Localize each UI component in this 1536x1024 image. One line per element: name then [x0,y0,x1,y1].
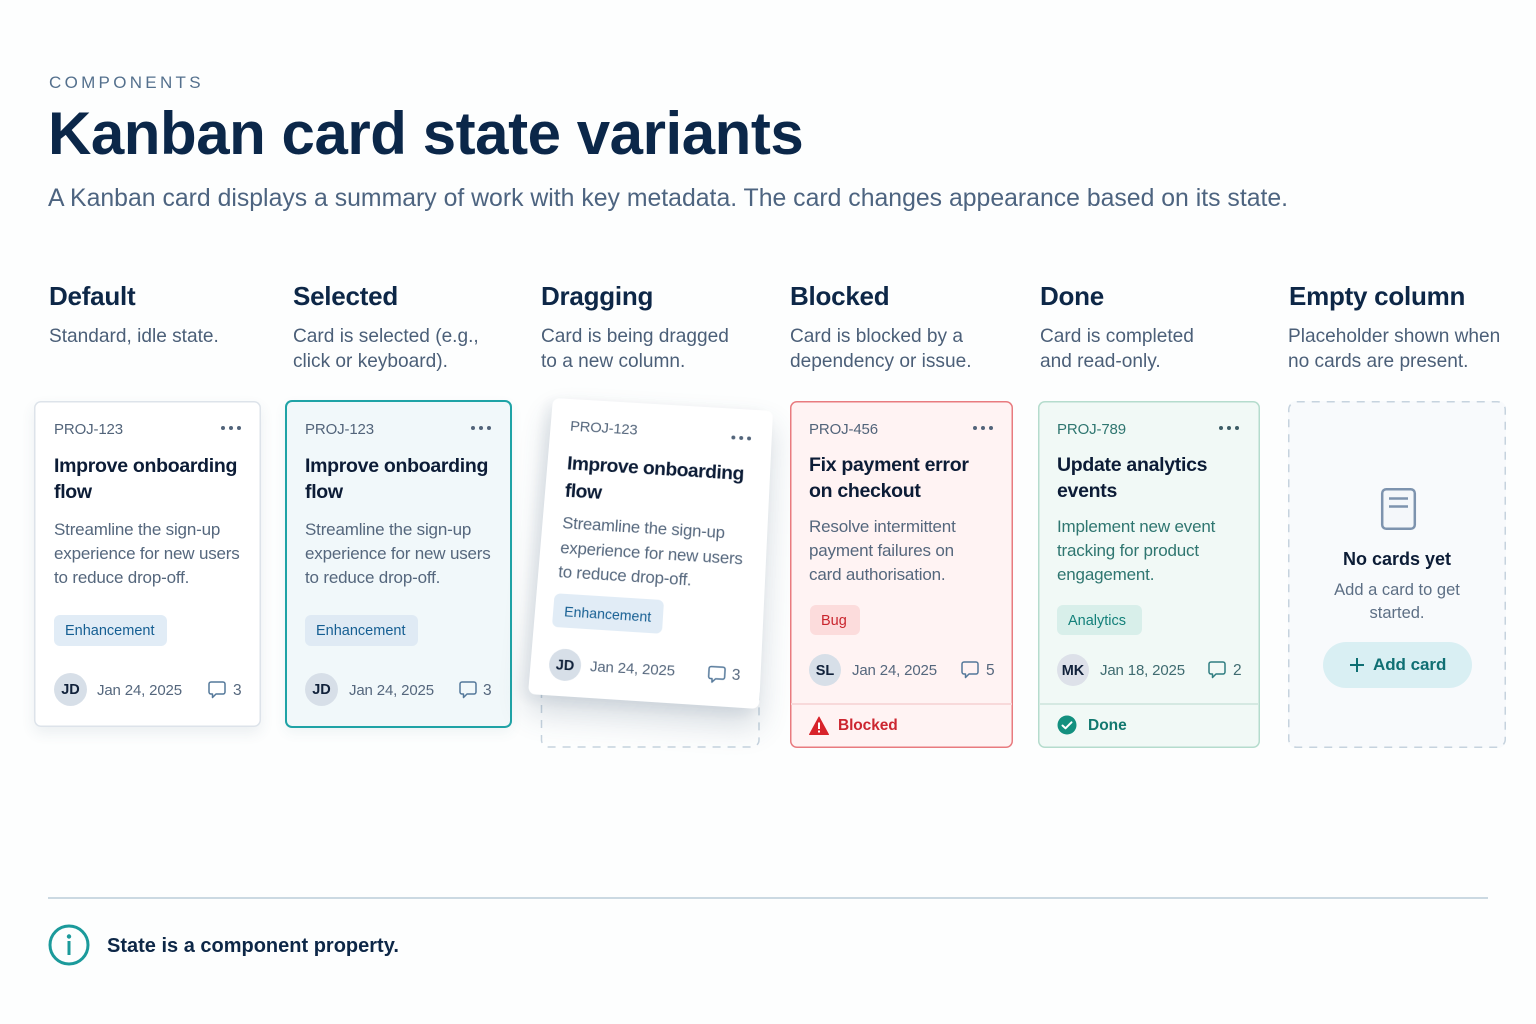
heading: Default: Default [49,281,135,311]
card description [54,520,240,587]
card description [558,513,743,590]
description: Done: and read-only. [1040,351,1161,372]
avatar [1057,654,1089,686]
avatar: JD [61,682,80,698]
card description: experience for new users [305,544,491,563]
tag: enhancement [54,615,167,646]
panel: blocked card [790,401,1013,748]
comment count: 2 [1233,662,1242,679]
icon: plus [1350,658,1364,672]
card id: PROJ-123 [54,421,123,438]
comment count: 5 [986,662,995,679]
description: Dragging: Card is being dragged [541,326,729,347]
card description: to reduce drop-off. [54,568,189,587]
card id: PROJ-123 [305,421,374,438]
card description: engagement. [1057,565,1154,584]
card description: card authorisation. [809,565,945,584]
card title [809,454,969,502]
empty description [1334,581,1460,622]
tag: enhancement: Enhancement [65,623,154,639]
heading: Blocked: Blocked [790,281,889,311]
card description: to reduce drop-off. [305,568,440,587]
comment count: 3 [731,667,741,684]
card description [809,517,956,584]
card description: experience for new users [560,538,743,568]
card description: Streamline the sign-up [562,513,725,542]
card id: PROJ-456 [809,421,878,438]
description: Done [1040,326,1194,372]
avatar: MK [1062,663,1084,679]
empty title: No cards yet [1343,549,1451,569]
card title: flow [564,480,602,504]
card title: Improve onboarding [566,453,744,485]
eyebrow: components: COMPONENTS [49,73,204,92]
icon: more menu [973,426,993,430]
avatar [305,673,338,706]
icon: comment [459,681,477,698]
description: Blocked [790,326,972,372]
description: Done: Card is completed [1040,326,1194,347]
tag: enhancement [305,615,418,646]
description: Dragging: to a new column. [541,351,685,372]
date: Jan 24, 2025 [590,658,675,680]
card id: PROJ-789 [1057,421,1126,438]
status: done: Done [1088,717,1127,734]
description: Default: Standard, idle state. [49,326,219,347]
icon: more menu [471,426,491,430]
description: Empty column: no cards are present. [1288,351,1468,372]
panel: done card [1038,401,1260,748]
card description [1057,517,1216,584]
icon: comment [961,661,979,678]
heading: Dragging: Dragging [541,281,653,311]
tag: bug: Bug [821,612,847,628]
description: Selected: click or keyboard). [293,351,448,372]
tag: enhancement: Enhancement [316,623,405,639]
card description: Streamline the sign-up [54,520,220,539]
heading: Done: Done [1040,281,1104,311]
tag: bug [810,605,860,635]
date: Jan 24, 2025 [852,662,937,679]
avatar: JD [555,657,575,674]
heading: Selected: Selected [293,281,398,311]
card description: Resolve intermittent [809,517,956,536]
title: Kanban card state variants [48,100,803,167]
card description: Implement new event [1057,517,1215,536]
card description [305,520,491,587]
footer note: State is a component property. [107,935,399,957]
card title: flow [305,481,343,503]
icon: more menu [731,436,752,440]
tag: analytics [1057,605,1142,635]
comment count: 3 [233,682,242,699]
tag: enhancement: Enhancement [564,603,652,625]
card description: to reduce drop-off. [558,562,692,590]
date: Jan 18, 2025 [1100,662,1185,679]
empty description: started. [1369,604,1425,622]
icon: info [48,924,90,966]
button: add card [1323,642,1472,688]
card description: Streamline the sign-up [305,520,471,539]
subtitle: A Kanban card displays a summary of work with key metadata. The card changes appearance based on its state. [48,185,1288,212]
card id: PROJ-123 [570,418,638,439]
avatar: SL [816,663,834,679]
description: Dragging [541,326,729,372]
status: blocked: Blocked [838,717,898,734]
card title: Update analytics [1057,454,1207,476]
description: Empty column [1288,326,1500,372]
card title: on checkout [809,480,921,502]
description: Selected: Card is selected (e.g., [293,326,479,347]
date: Jan 24, 2025 [97,682,182,699]
panel: empty column [1288,401,1506,748]
icon: check [1058,716,1076,734]
panel: selected card [285,400,512,728]
card title: Improve onboarding [305,455,488,477]
heading: Empty column: Empty column [1289,281,1465,311]
card title: Fix payment error [809,454,969,476]
panel: default card [34,401,261,727]
card title [305,455,488,503]
drop placeholder [540,692,760,748]
card title [54,455,237,503]
card title [564,453,744,504]
comment count: 3 [483,682,492,699]
card title: flow [54,481,92,503]
avatar [809,654,841,686]
icon: more menu [221,426,241,430]
icon: warning [809,716,829,735]
card title: Improve onboarding [54,455,237,477]
date: Jan 24, 2025 [349,682,434,699]
description: Empty column: Placeholder shown when [1288,326,1500,347]
avatar: JD [312,682,331,698]
panel: dragging card footer [549,648,741,684]
card description: experience for new users [54,544,240,563]
description: Selected [293,326,479,372]
panel: dragging card [528,398,773,709]
icon: document [1380,488,1416,530]
card description: payment failures on [809,541,954,560]
card title [1057,454,1207,502]
card description: tracking for product [1057,541,1199,560]
button label: Add card [1373,655,1446,674]
description: Blocked: dependency or issue. [790,351,972,372]
avatar [54,673,87,706]
tag: enhancement [552,593,664,634]
icon: comment [708,666,726,684]
description: Blocked: Card is blocked by a [790,326,963,347]
card title: events [1057,480,1117,502]
tag: analytics: Analytics [1068,612,1126,628]
icon: more menu [1219,426,1239,430]
icon: comment [1208,661,1226,678]
avatar [548,648,582,682]
icon: comment [208,681,226,698]
empty description: Add a card to get [1334,581,1460,599]
